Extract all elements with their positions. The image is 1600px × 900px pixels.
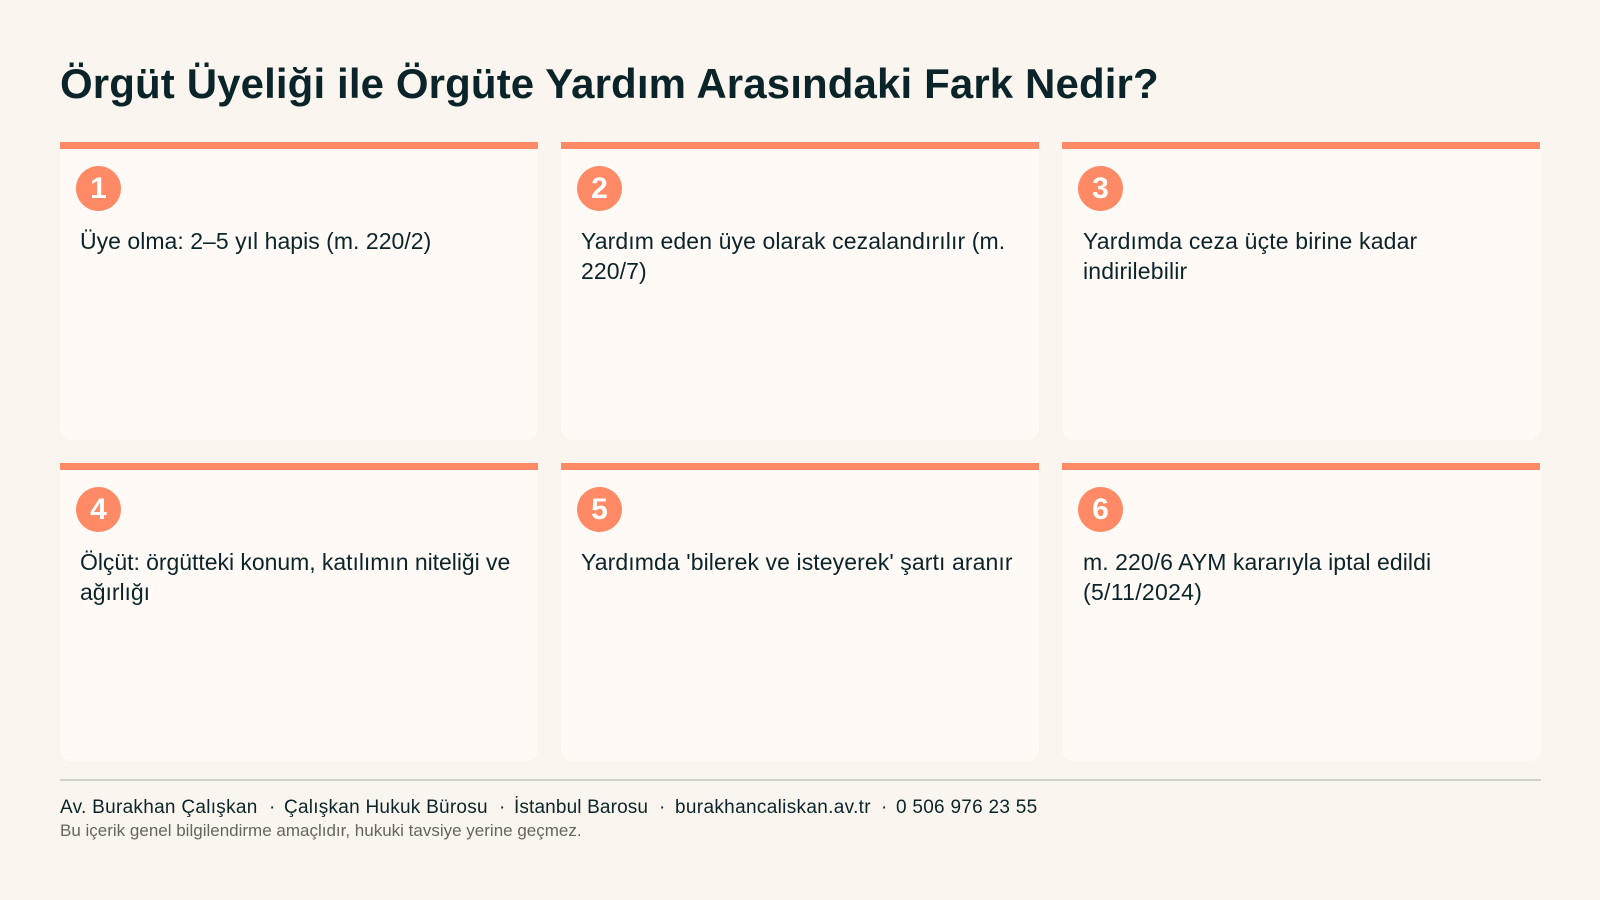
panel: card 6: [1062, 463, 1541, 761]
card 3 text: Yardımda ceza üçte birine kadar: [1083, 228, 1417, 254]
panel: card 1: [60, 142, 538, 440]
card 4 text: Ölçüt: örgütteki konum, katılımın niteliği ve: [80, 549, 510, 575]
card 6 text: [1083, 549, 1431, 605]
panel: card 2: [561, 142, 1039, 440]
card 2 number badge: 2: [591, 172, 608, 205]
footer contact line: 0 506 976 23 55: [896, 797, 1037, 818]
card 5 number badge: 5: [591, 493, 608, 526]
card 2 text: Yardım eden üye olarak cezalandırılır (m.: [581, 228, 1005, 254]
card 3 text: [1083, 228, 1417, 284]
card 4 number badge: [76, 487, 121, 532]
card 1 accent bar: [60, 142, 538, 149]
card 6 text: m. 220/6 AYM kararıyla iptal edildi: [1083, 549, 1431, 575]
panel: card 4: [60, 463, 538, 761]
footer contact line: İstanbul Barosu: [514, 797, 648, 818]
card 2 accent bar: [561, 142, 1039, 149]
footer contact line: Çalışkan Hukuk Bürosu: [284, 797, 488, 818]
footer contact line: ·: [659, 797, 665, 818]
card 3 accent bar: [1062, 142, 1540, 149]
card 4 text: [80, 549, 510, 605]
card 2 number badge: [577, 166, 622, 211]
card 1 number badge: [76, 166, 121, 211]
card 4 text: ağırlığı: [80, 579, 150, 605]
card 6 accent bar: [1062, 463, 1540, 470]
card 3 number badge: 3: [1092, 172, 1109, 205]
card 4 number badge: 4: [90, 493, 107, 526]
card 1 number badge: 1: [90, 172, 107, 205]
card 3 text: indirilebilir: [1083, 258, 1187, 284]
footer contact line: ·: [269, 797, 275, 818]
card 2 text: 220/7): [581, 258, 647, 284]
footer contact line: [60, 796, 1037, 818]
footer contact line: burakhancaliskan.av.tr: [675, 797, 871, 818]
card 2 text: [581, 228, 1005, 284]
card 4 accent bar: [60, 463, 538, 470]
title: Örgüt Üyeliği ile Örgüte Yardım Arasındaki Fark Nedir?: [60, 60, 1159, 107]
card 3 number badge: [1078, 166, 1123, 211]
card 5 accent bar: [561, 463, 1039, 470]
panel: card 5: [561, 463, 1039, 761]
card 6 text: (5/11/2024): [1083, 579, 1202, 605]
footer contact line: ·: [499, 797, 505, 818]
card 6 number badge: [1078, 487, 1123, 532]
footer disclaimer: Bu içerik genel bilgilendirme amaçlıdır, hukuki tavsiye yerine geçmez.: [60, 821, 582, 840]
footer contact line: ·: [881, 797, 887, 818]
card 5 number badge: [577, 487, 622, 532]
footer contact line: Av. Burakhan Çalışkan: [60, 797, 258, 818]
panel: card 3: [1062, 142, 1541, 440]
card 5 text: Yardımda 'bilerek ve isteyerek' şartı aranır: [581, 549, 1013, 575]
card 6 number badge: 6: [1092, 493, 1109, 526]
card 1 text: Üye olma: 2–5 yıl hapis (m. 220/2): [80, 228, 431, 254]
